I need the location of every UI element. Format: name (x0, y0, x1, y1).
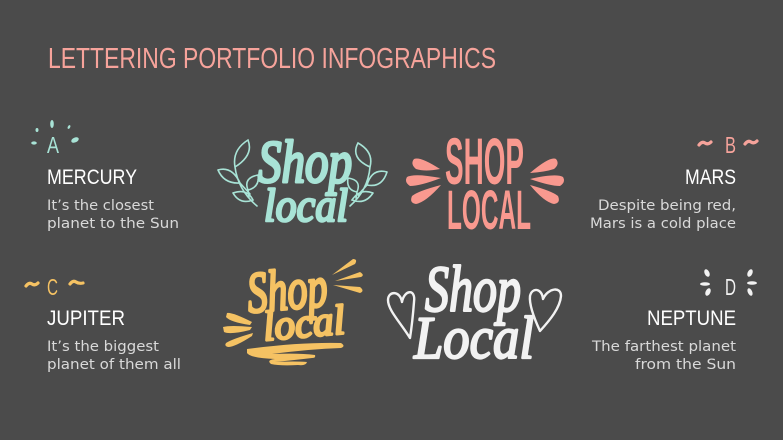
icon: rays (406, 158, 564, 204)
icon: right laurel (348, 143, 387, 206)
title: LETTERING PORTFOLIO INFOGRAPHICS (48, 43, 496, 75)
panel: Mercury (31, 120, 179, 232)
icon: right heart (530, 290, 561, 331)
lettering: Shop: Shop (425, 253, 521, 326)
text: Jupiter description (47, 339, 181, 373)
heading: Mercury: MERCURY (47, 166, 137, 189)
icon: underline swoosh (247, 343, 344, 365)
logo: coral Shop Local with rays (406, 124, 564, 241)
lettering: Local: Local (413, 305, 534, 371)
lettering: Shop: Shop (258, 129, 352, 195)
lettering: local: local (261, 298, 347, 350)
logo: mint Shop local with leaves (218, 129, 387, 232)
panel: Jupiter (26, 274, 181, 373)
logo: coral Shop Local with rays: LOCAL (447, 178, 531, 241)
text: Neptune description: from the Sun (635, 357, 736, 373)
heading: Neptune: NEPTUNE (647, 307, 736, 330)
logo: white Shop Local with hearts (388, 253, 561, 371)
lettering: local: local (264, 180, 348, 232)
heading: Mars: MARS (685, 166, 736, 189)
icon: left laurel (218, 140, 258, 206)
icon: A badge: A (47, 132, 60, 158)
icon: D badge: D (725, 274, 736, 300)
icon: left heart (388, 292, 414, 338)
icon: B badge: B (725, 132, 736, 158)
panel: Neptune (591, 268, 757, 373)
text: Mars description (590, 198, 736, 232)
icon: B badge (699, 132, 757, 158)
icon: D badge (700, 268, 757, 300)
icon: A badge (31, 120, 80, 158)
text: Neptune description (591, 339, 737, 373)
icon: strokes (223, 259, 363, 347)
text: Neptune description: The farthest planet (591, 339, 737, 355)
text: Jupiter description: It’s the biggest (47, 339, 160, 355)
text: Mercury description: It’s the closest (47, 198, 155, 214)
text: Mercury description: planet to the Sun (47, 216, 179, 232)
panel: Mars (590, 132, 757, 232)
heading: Jupiter: JUPITER (47, 307, 125, 330)
logo: yellow Shop local with strokes (223, 254, 363, 365)
icon: C badge (26, 274, 83, 300)
text: Mercury description (47, 198, 179, 232)
text: Jupiter description: planet of them all (47, 357, 181, 373)
lettering: Shop: Shop (244, 254, 330, 325)
icon: C badge: C (47, 274, 58, 300)
logo: coral Shop Local with rays: SHOP (445, 124, 524, 198)
text: Mars description: Mars is a cold place (590, 216, 736, 232)
text: Mars description: Despite being red, (598, 198, 736, 214)
